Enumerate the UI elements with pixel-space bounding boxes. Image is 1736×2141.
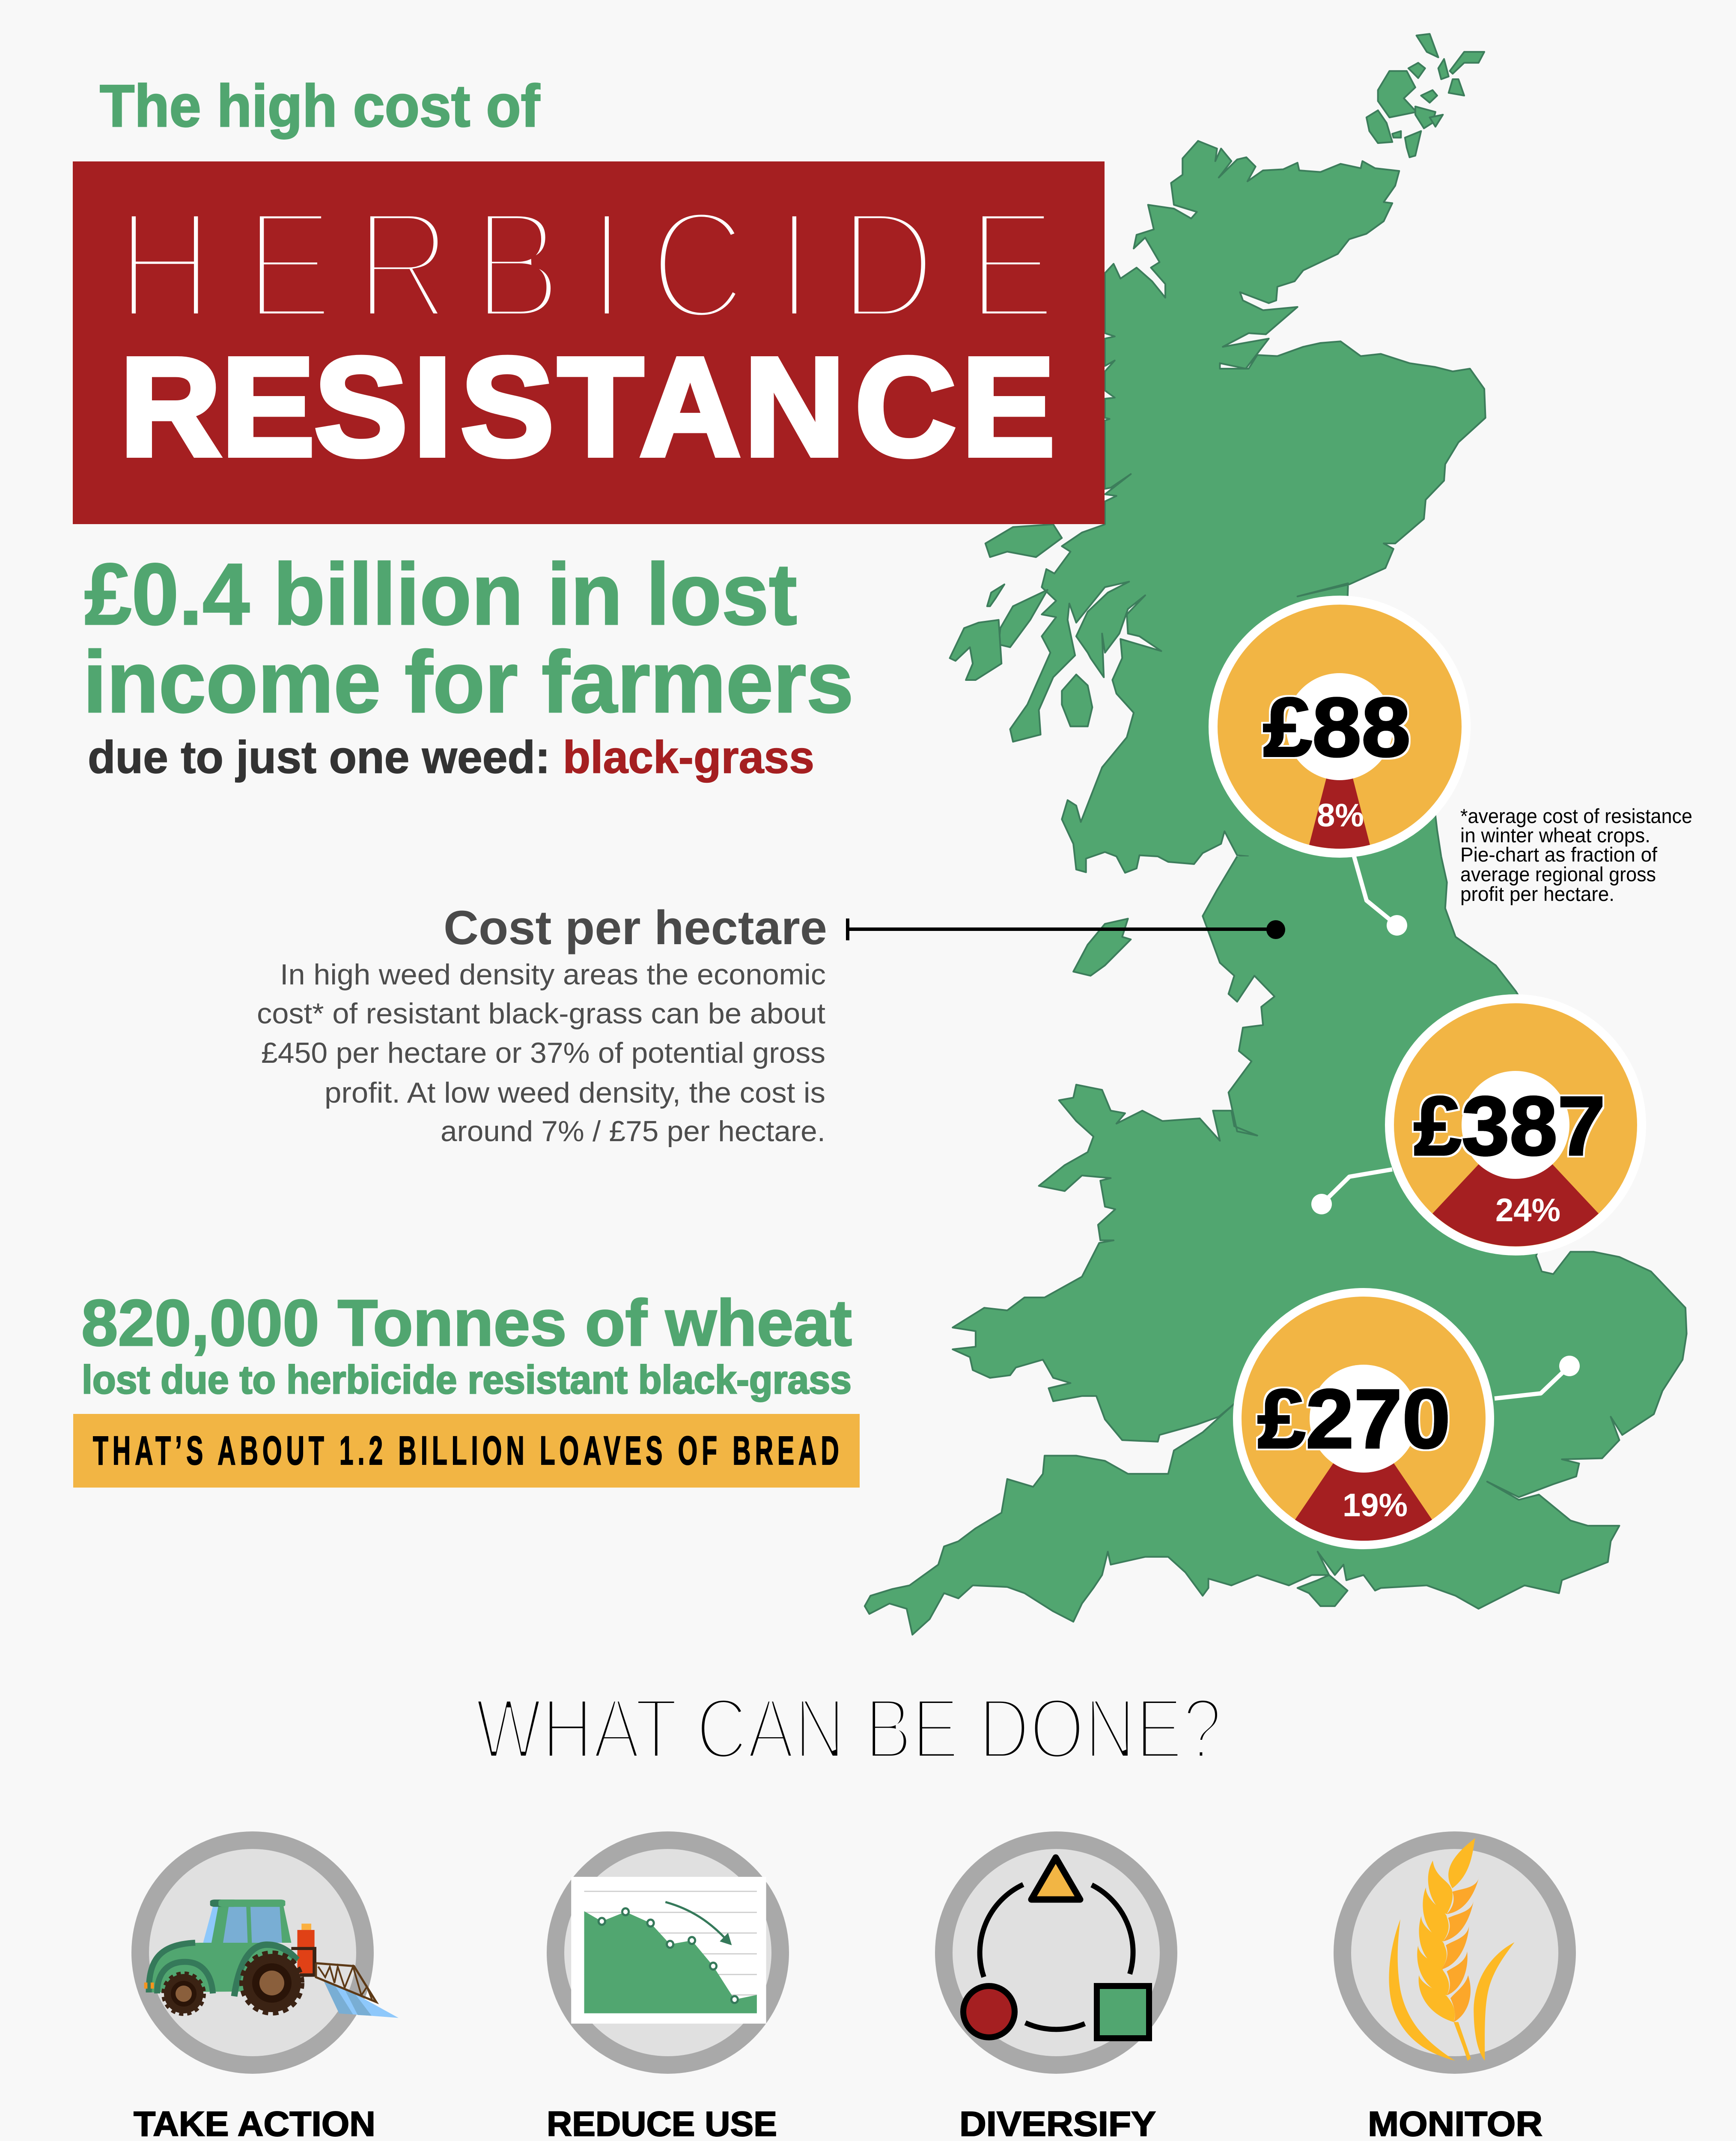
callout: loaves of bread: [73, 1414, 860, 1488]
icon: diversify cycle: [935, 1831, 1177, 2074]
paragraph: cost per hectare: [257, 958, 826, 1148]
pie chart: south £270 19%: 19%: [1343, 1487, 1408, 1524]
paragraph: cost per hectare: cost* of resistant black-grass can be about: [257, 997, 825, 1030]
headline: lost income: £0.4 billion in lost: [84, 546, 797, 643]
pie chart: midlands £387 24%: [1385, 994, 1646, 1255]
footnote: average regional gross: [1460, 863, 1656, 886]
sub-headline: black-grass: due to just one weed: black-grass: [88, 731, 814, 783]
title: RESISTANCE: RESISTANCE: [120, 329, 1055, 485]
pie chart: midlands £387 24%: £387: [1414, 1079, 1605, 1173]
headline: tonnes of wheat: 820,000 Tonnes of wheat: [81, 1286, 852, 1360]
connector: east: [1495, 1356, 1580, 1399]
paragraph: cost per hectare: profit. At low weed density, the cost is: [325, 1076, 825, 1109]
map: England and Wales: [865, 856, 1687, 1635]
heading: what can be done: WHAT CAN BE DONE?: [475, 1680, 1222, 1777]
pie chart: north £88 8%: 8%: [1317, 797, 1364, 834]
sub-headline: lost due to resistance: lost due to herbicide resistant black-grass: [82, 1357, 852, 1402]
pie chart: midlands £387 24%: 24%: [1495, 1192, 1560, 1229]
pointer line: [848, 918, 1285, 940]
footnote: Pie-chart as fraction of: [1460, 843, 1658, 866]
icon: tractor: [131, 1831, 399, 2074]
pie chart: south £270 19%: [1233, 1288, 1494, 1549]
paragraph: cost per hectare: In high weed density areas the economic: [280, 958, 826, 991]
headline: lost income: [83, 546, 854, 731]
footnote: *average cost of resistance: [1460, 805, 1692, 827]
icon: declining chart: [547, 1831, 789, 2074]
connector: north: [1353, 852, 1407, 936]
title: HERBICIDE: HERBICIDE: [116, 178, 1057, 352]
paragraph: cost per hectare: £450 per hectare or 37% of potential gross: [261, 1037, 825, 1069]
headline: lost income: income for farmers: [83, 633, 854, 731]
heading: The high cost of: The high cost of: [100, 73, 540, 139]
callout: loaves of bread: THAT’S ABOUT 1.2 BILLION LOAVES OF BREAD: [93, 1427, 839, 1473]
connector: midlands: [1311, 1169, 1392, 1214]
pie chart: north £88 8%: [1209, 596, 1471, 858]
icon: wheat: [1334, 1831, 1576, 2074]
paragraph: cost per hectare: around 7% / £75 per hectare.: [441, 1115, 825, 1148]
footnote: in winter wheat crops.: [1460, 824, 1650, 847]
footnote: profit per hectare.: [1460, 883, 1614, 905]
title banner: [73, 161, 1105, 524]
heading: Cost per hectare: Cost per hectare: [444, 901, 827, 954]
map: Scotland and islands: [950, 34, 1486, 873]
map of Great Britain: [865, 34, 1687, 1635]
pie chart: south £270 19%: £270: [1257, 1372, 1450, 1466]
footnote: [1460, 805, 1692, 905]
pie chart: north £88 8%: £88: [1263, 680, 1411, 774]
